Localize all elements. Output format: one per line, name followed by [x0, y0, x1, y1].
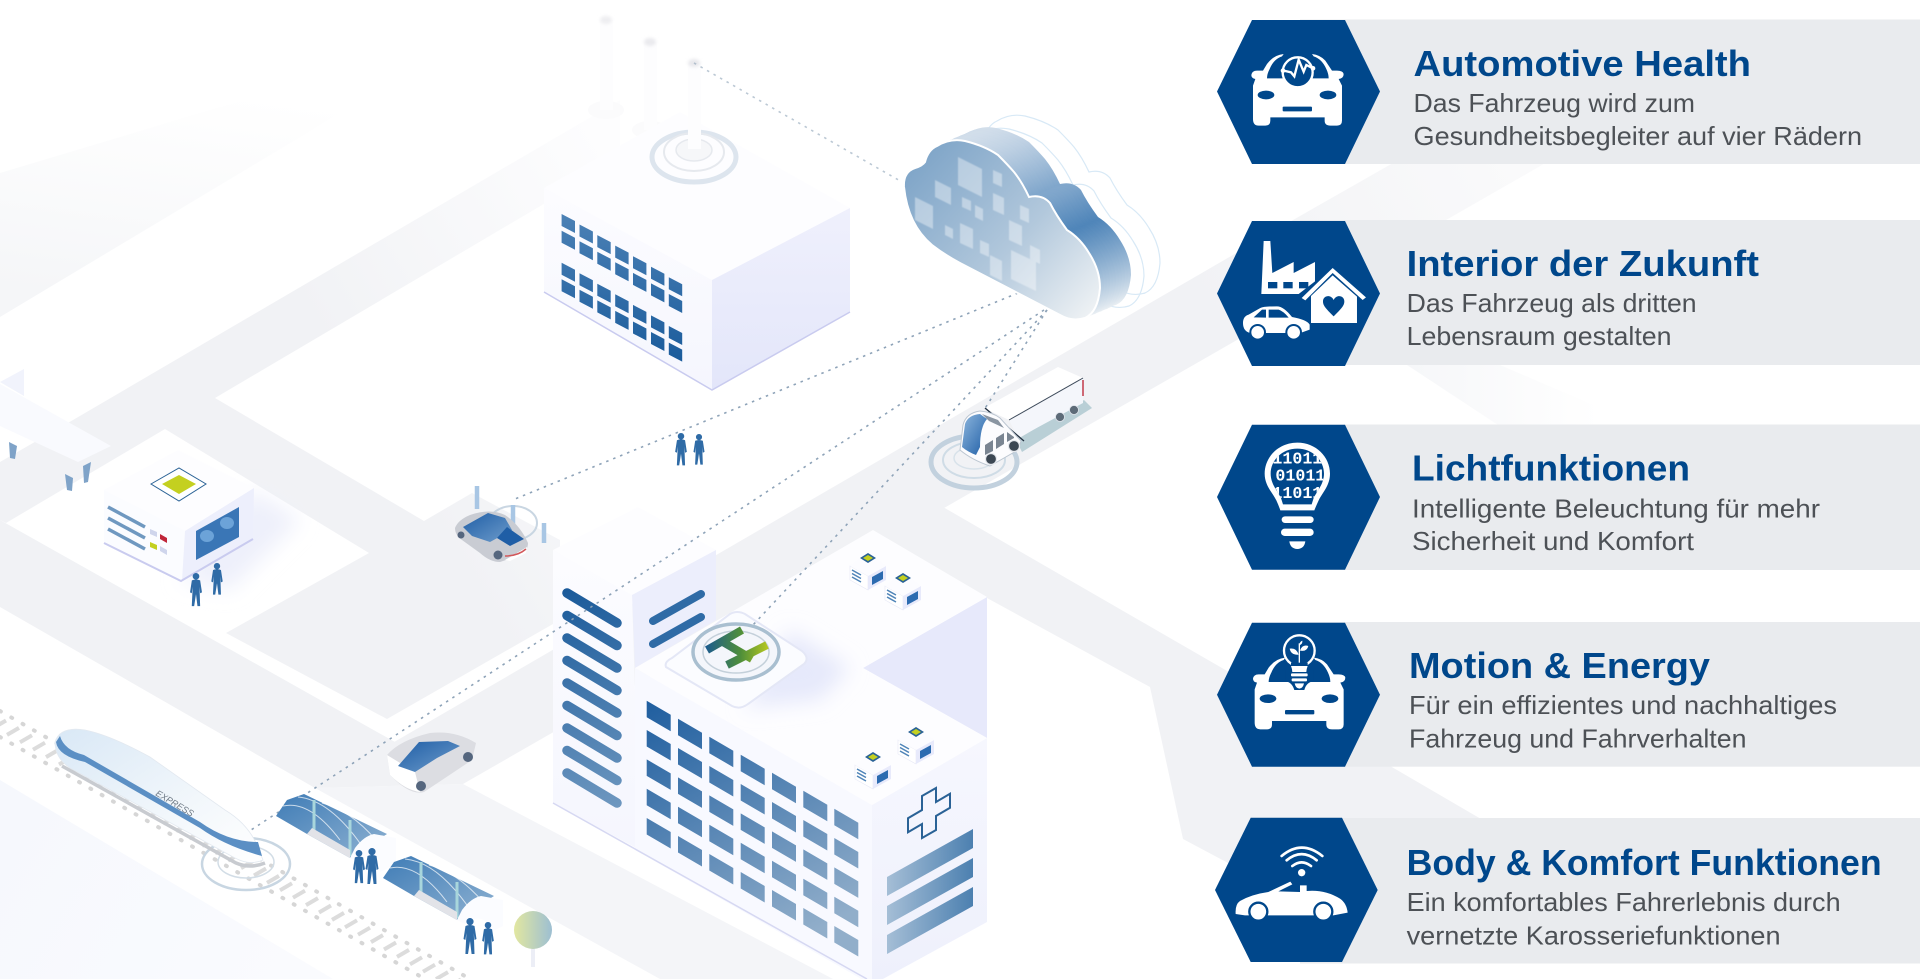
hexagon [1215, 818, 1378, 962]
band [1300, 424, 1920, 570]
icon: car with health pulse [1251, 54, 1344, 126]
tree [514, 911, 552, 967]
factory base edge [544, 292, 850, 390]
description line two: vernetzte Karosseriefunktionen [1407, 920, 1781, 950]
main building right wall [872, 738, 987, 979]
cloud extrusion [908, 127, 1131, 318]
factory chimneys [588, 16, 668, 139]
notch wall [863, 597, 987, 738]
trailer top [984, 367, 1083, 420]
hospital [553, 507, 987, 979]
helipad shadow [745, 630, 850, 708]
heading: Interior der Zukunft [1407, 243, 1759, 284]
train station canopy one [276, 794, 396, 872]
car at charging station [455, 486, 544, 562]
band [1300, 818, 1920, 964]
building left wall [104, 490, 185, 581]
hospital side bars [887, 829, 973, 954]
charging signal ring [489, 506, 537, 540]
trailer side [1009, 378, 1083, 438]
roof glass [398, 741, 460, 772]
tower window bars [567, 593, 617, 803]
rear white section [387, 755, 420, 792]
charging posts [477, 486, 544, 543]
trailer wheels [1056, 406, 1078, 422]
railway track [0, 711, 474, 979]
truck signal ring [931, 436, 1017, 488]
building base edge [553, 803, 867, 979]
train blue stripe [56, 736, 262, 856]
icon: light bulb with binary code: 11011 [1272, 485, 1322, 504]
wheels [416, 752, 473, 791]
tower top [553, 507, 716, 595]
hexagon [1217, 623, 1380, 767]
heading: Body & Komfort Funktionen [1407, 842, 1882, 883]
tower right wall [632, 550, 716, 668]
train station canopy two [383, 856, 503, 934]
wall stripes [108, 507, 145, 549]
truck [931, 367, 1092, 488]
helipad base [666, 612, 807, 708]
band [1300, 220, 1920, 365]
icon: factory, house and car [1243, 241, 1366, 340]
elevated bridge [0, 369, 111, 491]
description: Das Fahrzeug als dritten [1407, 288, 1697, 318]
yellow chip [162, 475, 196, 494]
cloud front face [904, 140, 1100, 319]
cloud outer signal lines [948, 115, 1160, 307]
hexagon [1217, 221, 1380, 366]
factory right wall [712, 208, 850, 390]
car visor [497, 527, 524, 546]
small data building [104, 450, 300, 590]
people pair at data building [190, 563, 223, 606]
dotted connections to cloud [248, 63, 1047, 832]
icon: convertible with wireless signal [1236, 848, 1348, 921]
truck cab [960, 411, 1021, 466]
factory building [544, 16, 850, 390]
cab rear frame line [985, 408, 1024, 441]
hexagon [1217, 425, 1380, 570]
status lights [150, 529, 167, 555]
trailer top edge [1009, 378, 1083, 420]
chip outline [151, 468, 206, 501]
cab wheels [986, 440, 1020, 464]
heading: Automotive Health [1414, 43, 1751, 84]
medical cross [908, 788, 950, 838]
car body [455, 512, 528, 562]
panel: Interior der Zukunft [1217, 220, 1920, 366]
main building left wall [635, 668, 872, 979]
car wheels [458, 532, 502, 560]
car nose [505, 547, 527, 561]
signal ring on chimney [652, 59, 736, 182]
rooftop server modules [850, 552, 934, 789]
trailer tail light [1082, 380, 1084, 396]
panel: Lichtfunktionen [1217, 424, 1920, 570]
hospital windows [647, 701, 858, 956]
cab windshield [962, 414, 987, 455]
factory windows [562, 214, 682, 362]
train signal rings [202, 838, 290, 890]
cab roof window [982, 414, 1004, 428]
heading: Lichtfunktionen [1412, 448, 1690, 489]
cloud data tiles [915, 157, 1040, 291]
description: Ein komfortables Fahrerlebnis durch [1407, 887, 1841, 917]
tower left wall [553, 550, 640, 850]
hexagon [1217, 20, 1380, 164]
icon: light bulb with binary code [1265, 443, 1330, 549]
icon: light bulb with binary code: 01011 [1275, 468, 1325, 487]
description line two: Fahrzeug und Fahrverhalten [1409, 723, 1746, 753]
train body [55, 729, 263, 863]
people pair mid road [675, 433, 705, 465]
cab side panels [985, 432, 1014, 455]
band [1300, 622, 1920, 767]
building base edge [104, 539, 253, 581]
heading: Motion & Energy [1409, 645, 1710, 686]
description line two: Gesundheitsbegleiter auf vier Rädern [1414, 121, 1862, 151]
description: Intelligente Beleuchtung für mehr [1412, 493, 1820, 523]
factory left wall [544, 188, 712, 390]
panel: Automotive Health [1217, 20, 1920, 164]
train [55, 729, 290, 890]
helipad H letter [707, 630, 767, 665]
icon: light bulb with binary code: 11011 [1272, 450, 1322, 469]
tower side bars [653, 594, 701, 644]
train label: EXPRESS [154, 788, 196, 819]
panel: Motion & Energy [1217, 622, 1920, 767]
description line two: Lebensraum gestalten [1407, 321, 1672, 351]
band [1300, 20, 1920, 164]
panel: Body & Komfort Funktionen [1215, 818, 1920, 964]
description: Das Fahrzeug wird zum [1414, 88, 1695, 118]
building shadow [180, 490, 300, 590]
icon: car with plant bulb [1253, 635, 1345, 729]
building top [104, 450, 254, 531]
car body [387, 732, 476, 793]
description: Für ein effizientes und nachhaltiges [1409, 690, 1837, 720]
car roof glass [463, 513, 512, 542]
helipad ring [693, 624, 779, 680]
people pair on platform one [353, 848, 378, 884]
people pair on platform two [464, 918, 494, 954]
car front stripe [505, 549, 526, 556]
truck shadow [1016, 400, 1092, 452]
silver car on road [387, 732, 476, 793]
building right wall [182, 488, 254, 581]
cloud [904, 115, 1160, 319]
blue screen [196, 507, 239, 560]
main roof [635, 530, 987, 805]
train underbody edge [62, 766, 265, 866]
factory top [544, 112, 850, 280]
description line two: Sicherheit und Komfort [1412, 526, 1695, 556]
